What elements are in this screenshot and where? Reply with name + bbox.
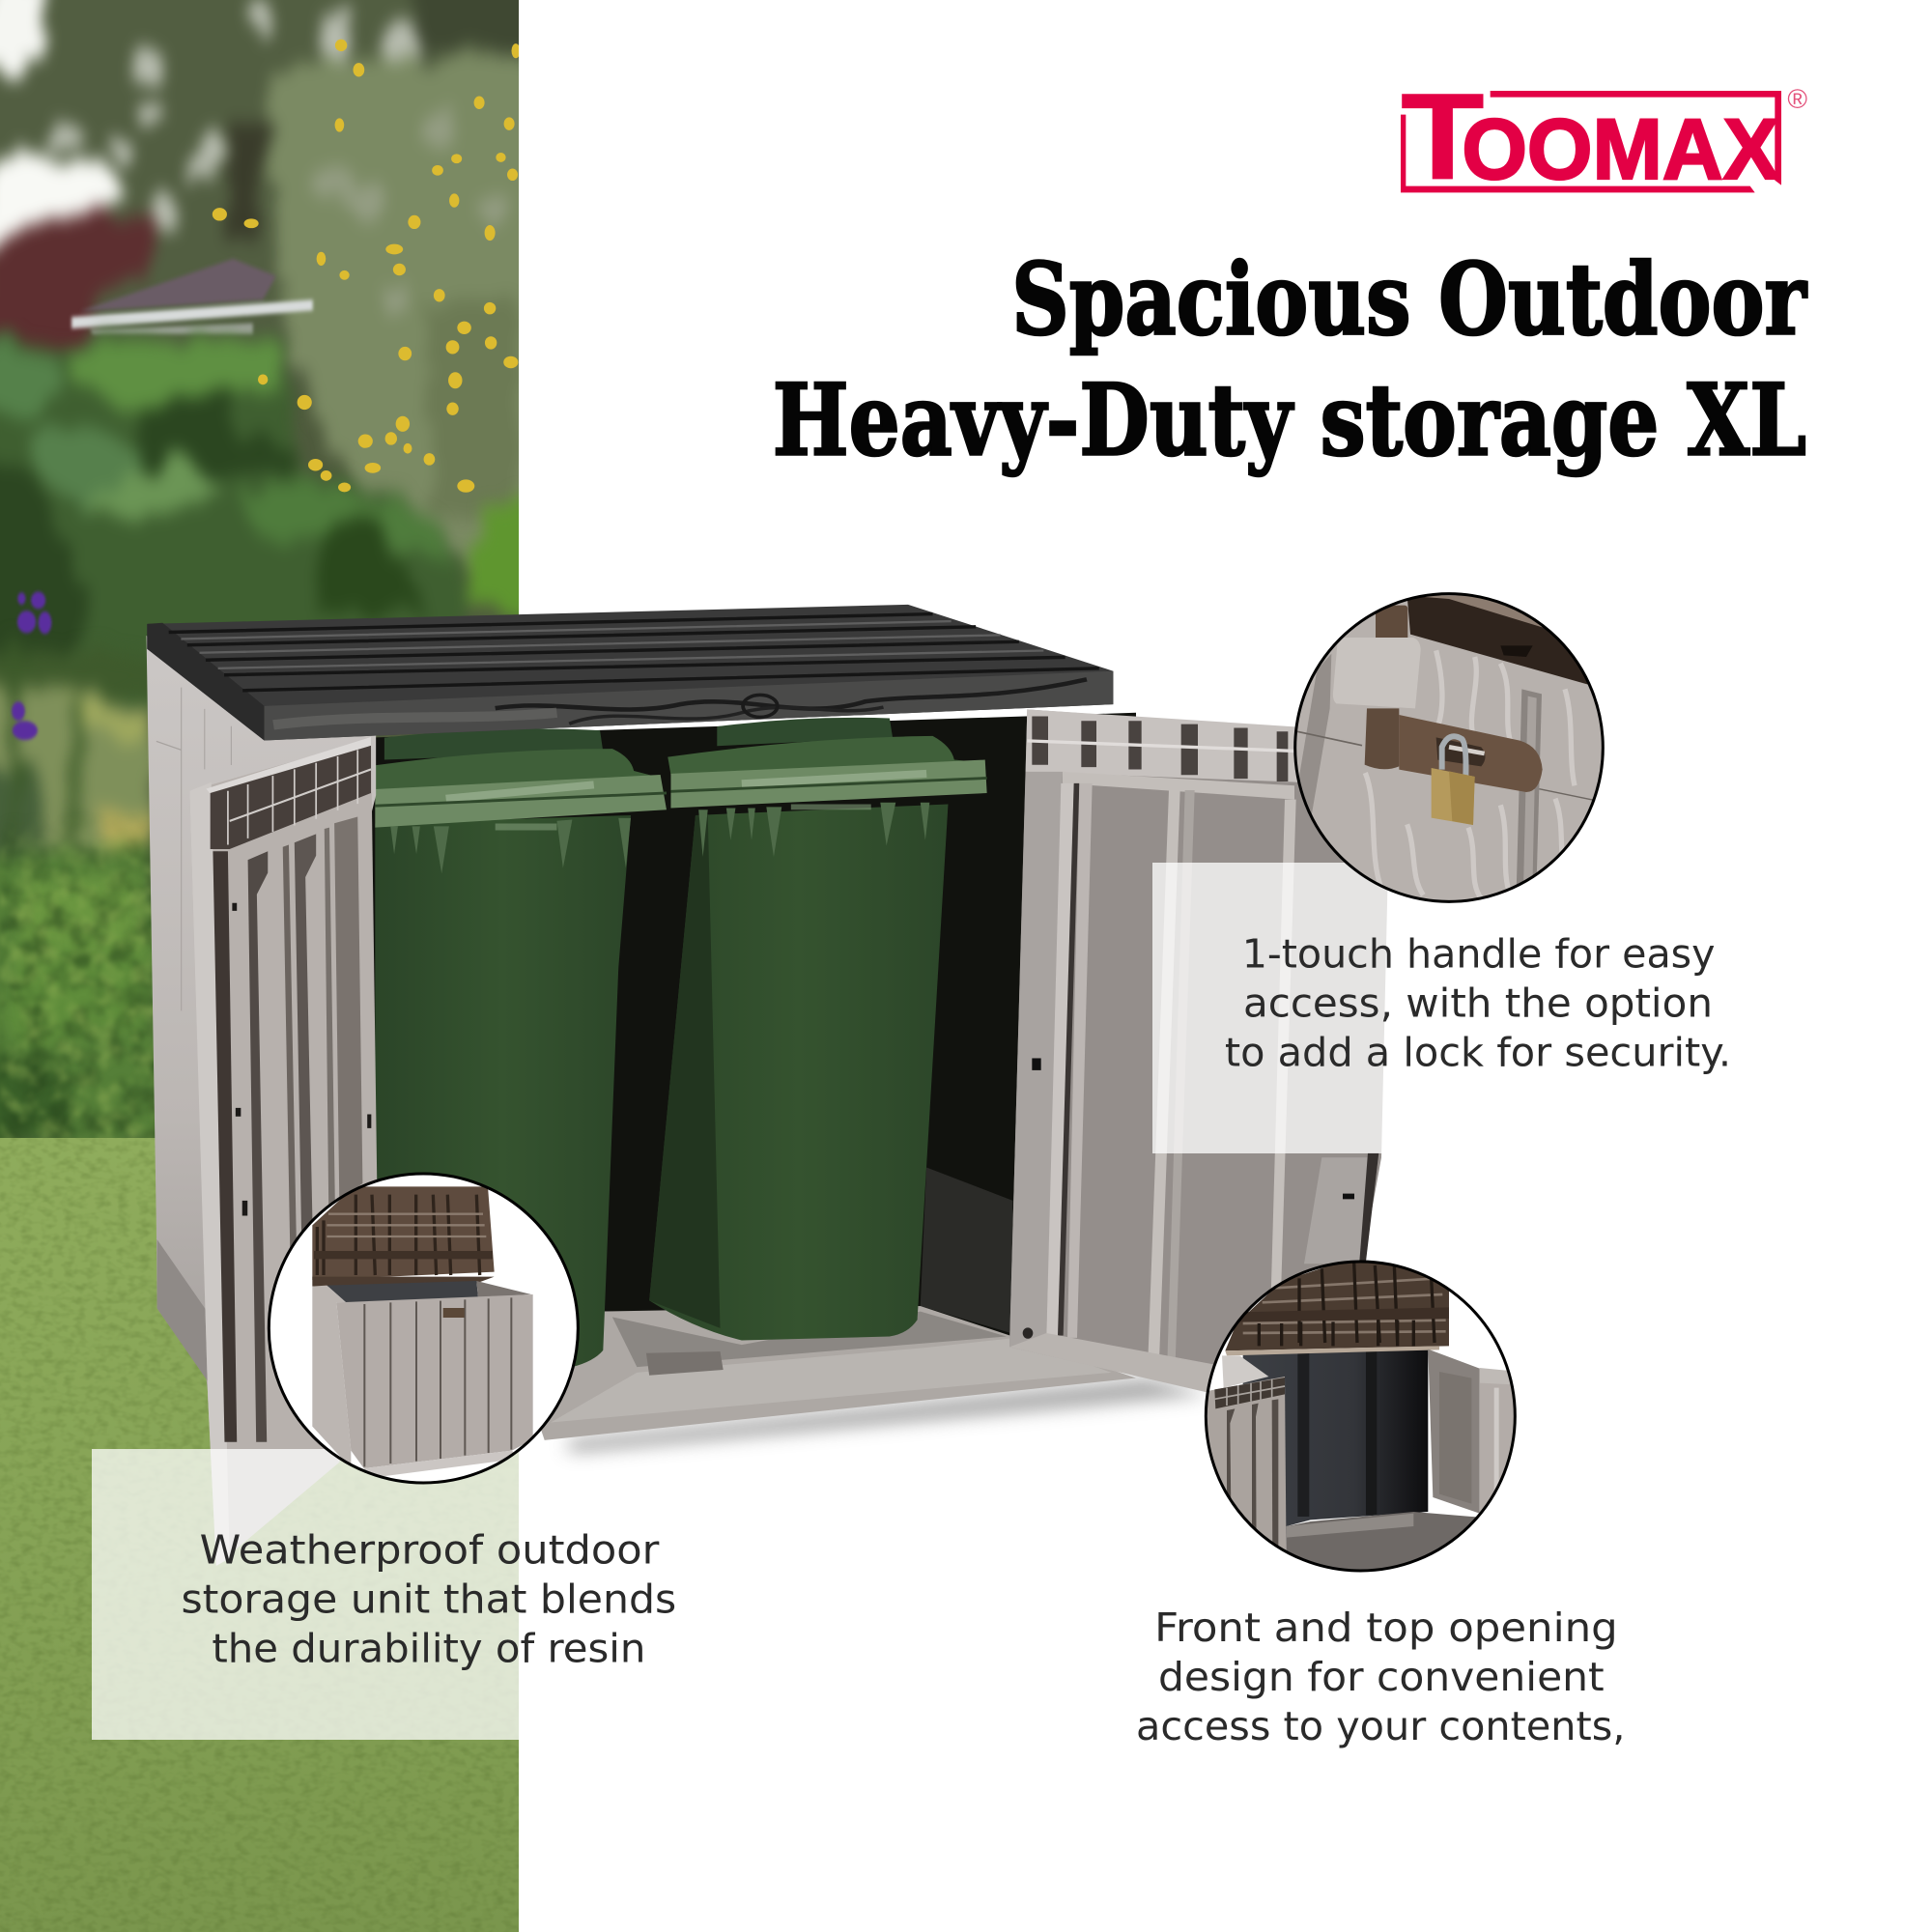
back lower panel bbox=[921, 1167, 1012, 1334]
logo wordmark: OOMAX bbox=[1462, 100, 1779, 197]
caption: weatherproof: Weatherproof outdoor bbox=[200, 1527, 660, 1574]
shed floor bbox=[520, 1306, 1136, 1440]
circle inset: padlock handle bbox=[1293, 592, 1605, 903]
house roof bbox=[71, 259, 313, 334]
lawn grass texture bbox=[0, 1138, 519, 1932]
registered mark: ® bbox=[1787, 84, 1807, 114]
translucent caption panel: weatherproof bbox=[92, 1449, 519, 1740]
right door bbox=[1009, 709, 1391, 1393]
caption: handle bbox=[1225, 930, 1731, 1075]
large leaves bbox=[0, 336, 539, 712]
yellow flowers bbox=[213, 40, 520, 493]
roof bbox=[147, 605, 1113, 740]
left side wall bbox=[147, 636, 376, 1442]
circle inset: open shed bbox=[1206, 1259, 1517, 1584]
logo initial T: T bbox=[1401, 68, 1485, 205]
left bin bbox=[375, 728, 667, 1378]
door frame left bbox=[1009, 772, 1063, 1347]
brand logo bbox=[1401, 68, 1807, 205]
left door bbox=[189, 737, 378, 1566]
background garden photo bbox=[0, 0, 566, 1932]
caption: handle: to add a lock for security. bbox=[1225, 1029, 1731, 1075]
shrub foliage mottling bbox=[0, 834, 155, 1138]
caption: front and top opening: access to your contents, bbox=[1136, 1703, 1625, 1749]
caption: weatherproof bbox=[181, 1527, 676, 1672]
translucent caption panel: handle bbox=[1152, 863, 1394, 1153]
caption: front and top opening: Front and top opening bbox=[1154, 1605, 1618, 1651]
shed interior bbox=[369, 713, 1136, 1401]
title bbox=[773, 242, 1807, 479]
lower garden shrubs bbox=[0, 591, 539, 1149]
caption: weatherproof: the durability of resin bbox=[212, 1626, 645, 1672]
shed left wall and door bbox=[147, 636, 378, 1566]
caption: handle: access, with the option bbox=[1243, 980, 1713, 1026]
door top grid bbox=[1026, 709, 1326, 783]
upper garden blurred plants bbox=[0, 0, 566, 712]
circle inset: deck box bbox=[269, 1174, 578, 1483]
ground shadow bbox=[569, 1378, 1210, 1453]
caption: front and top opening: design for convenient bbox=[1158, 1654, 1605, 1700]
lawn bbox=[0, 1138, 519, 1932]
caption: weatherproof: storage unit that blends bbox=[181, 1577, 676, 1623]
door grid panel bbox=[211, 746, 371, 849]
logo frame bbox=[1401, 91, 1781, 192]
shed interior and bins bbox=[369, 713, 1210, 1453]
caption: handle: 1-touch handle for easy bbox=[1242, 930, 1716, 977]
caption: front and top opening bbox=[1136, 1605, 1625, 1749]
right bin bbox=[649, 718, 987, 1341]
purple iris flowers bbox=[12, 591, 51, 740]
